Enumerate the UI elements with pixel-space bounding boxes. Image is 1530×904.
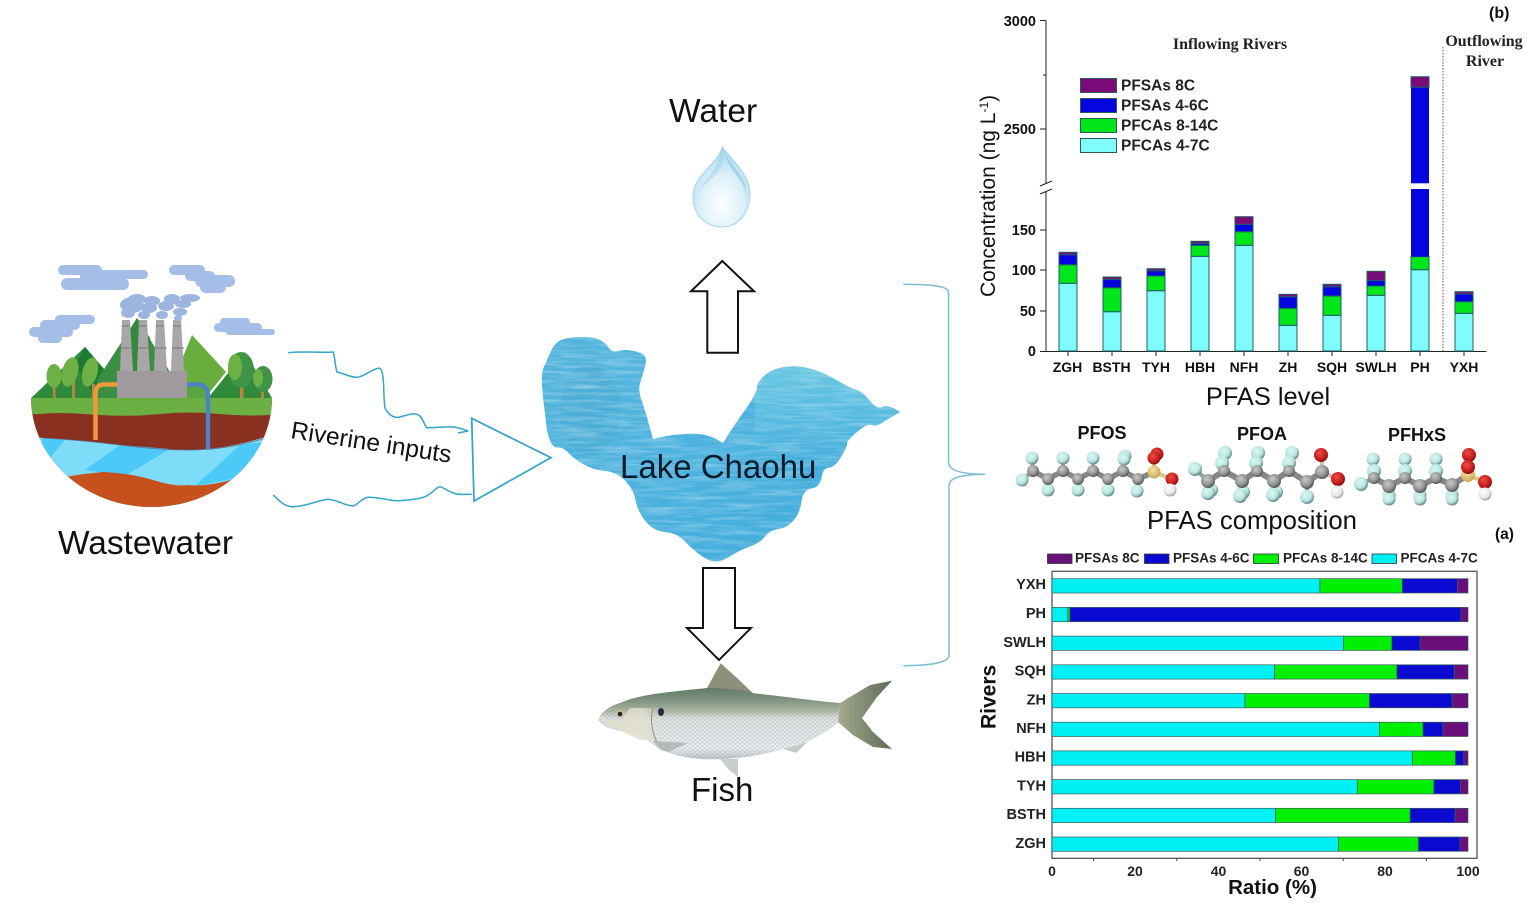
x axis: YXH	[1450, 359, 1478, 375]
bar BSTH	[1103, 277, 1121, 351]
y axis: 150	[1012, 223, 1036, 239]
y axis title: -1	[977, 102, 991, 113]
panel: lake chaohu	[535, 330, 905, 570]
group labels: Outflowing	[1445, 33, 1523, 50]
panel tag a: (a)	[1495, 526, 1514, 543]
y axis title: Rivers	[978, 665, 1000, 729]
icon: mountains and trees	[31, 318, 272, 398]
x axis: ZH	[1279, 359, 1297, 375]
PFOA name: PFOA	[1237, 424, 1287, 444]
row ZGH	[1052, 837, 1468, 851]
row labels: TYH	[1017, 778, 1046, 794]
molecule: PFOS	[1016, 448, 1178, 498]
y axis	[1004, 14, 1052, 360]
bar HBH	[1191, 241, 1209, 351]
legend	[1048, 550, 1478, 566]
panel: PFAS molecular structures	[1016, 423, 1492, 535]
row labels: PH	[1026, 606, 1046, 622]
row BSTH	[1052, 808, 1468, 823]
icon: factory chimneys	[117, 320, 187, 398]
PFOS name: PFOS	[1077, 423, 1127, 443]
stacked bars	[1059, 77, 1473, 351]
arrow: riverine inputs	[273, 352, 551, 507]
riverine inputs label: Riverine inputs	[289, 417, 453, 469]
x axis: HBH	[1185, 359, 1215, 375]
group labels	[1173, 33, 1523, 70]
legend: PFCAs 8-14C	[1121, 118, 1218, 134]
bar SWLH	[1367, 271, 1385, 351]
y axis: 50	[1020, 304, 1036, 320]
row TYH	[1052, 780, 1468, 794]
icon: polluted landscape globe	[25, 265, 280, 520]
section title: PFAS composition: PFAS composition	[1147, 507, 1357, 535]
water label: Water	[669, 93, 757, 130]
wastewater label: Wastewater	[58, 525, 233, 562]
legend: PFSAs 8C	[1075, 550, 1140, 566]
x axis tick labels: 60	[1294, 863, 1309, 879]
row YXH	[1052, 579, 1468, 593]
row labels: NFH	[1016, 721, 1046, 737]
bar PH	[1411, 77, 1429, 351]
icon: water drop	[693, 147, 750, 227]
lower river line	[273, 487, 472, 507]
panel: a composition ratio bar chart	[978, 526, 1514, 899]
legend: PFSAs 4-6C	[1173, 550, 1250, 566]
triangle arrowhead	[472, 418, 551, 501]
molecule: PFOA	[1188, 446, 1345, 504]
y axis: 100	[1012, 263, 1036, 279]
icon: soil and groundwater layers	[31, 398, 272, 507]
group labels: River	[1466, 53, 1504, 70]
brace connector	[903, 284, 985, 666]
PFHxS name: PFHxS	[1388, 425, 1446, 445]
bar ZH	[1279, 294, 1297, 351]
panel: fish output	[598, 568, 892, 808]
panel tag b: (b)	[1489, 5, 1509, 22]
row PH	[1052, 607, 1468, 622]
group labels: Inflowing Rivers	[1173, 36, 1287, 53]
x axis tick labels: 80	[1377, 863, 1393, 879]
y axis: 2500	[1004, 122, 1036, 138]
x axis: ZGH	[1053, 359, 1082, 375]
x axis: BSTH	[1092, 359, 1131, 375]
x axis: TYH	[1142, 359, 1170, 375]
legend: PFSAs 8C	[1121, 78, 1195, 94]
row labels: HBH	[1015, 750, 1046, 766]
row NFH	[1052, 722, 1468, 736]
icon: smoke plumes	[120, 294, 200, 321]
row ZH	[1052, 694, 1468, 708]
legend: PFCAs 8-14C	[1283, 550, 1368, 566]
x axis: NFH	[1230, 359, 1258, 375]
x axis tick labels: 0	[1048, 863, 1056, 879]
y axis: 3000	[1004, 14, 1036, 30]
lake label: Lake Chaohu	[620, 448, 816, 485]
row labels: ZH	[1027, 692, 1046, 708]
icon: clouds	[29, 265, 275, 343]
panel: water output	[669, 93, 757, 353]
legend	[1080, 78, 1218, 154]
y axis: 0	[1028, 344, 1036, 360]
bar SQH	[1323, 284, 1341, 351]
bar TYH	[1147, 269, 1165, 351]
y axis title: Concentration (ng L	[977, 113, 1000, 297]
molecule: PFHxS	[1354, 448, 1492, 506]
panel: b PFAS level stacked bar chart	[977, 5, 1523, 411]
x axis	[1046, 351, 1486, 375]
arrow: up to water	[691, 261, 754, 353]
row labels: BSTH	[1007, 807, 1046, 823]
panel: wastewater source	[25, 265, 280, 562]
upper river line	[288, 352, 468, 433]
legend: PFCAs 4-7C	[1400, 550, 1478, 566]
x axis tick labels: 20	[1127, 863, 1143, 879]
row SWLH	[1052, 636, 1468, 650]
chart frame	[1052, 571, 1477, 861]
icon: fish	[598, 663, 892, 777]
x axis: SWLH	[1355, 359, 1397, 375]
x axis tick labels: 100	[1456, 863, 1480, 879]
x axis tick labels: 40	[1211, 863, 1226, 879]
x axis title: PFAS level	[1206, 383, 1330, 411]
row SQH	[1052, 665, 1468, 679]
x axis: SQH	[1317, 359, 1347, 375]
row labels	[1003, 577, 1046, 852]
lake shape	[535, 330, 905, 570]
x axis tick labels	[1048, 863, 1480, 879]
y axis title: )	[977, 95, 1000, 102]
row labels: ZGH	[1015, 836, 1046, 852]
row labels: YXH	[1016, 577, 1046, 593]
x axis: PH	[1410, 359, 1430, 375]
legend: PFCAs 4-7C	[1121, 138, 1210, 154]
x axis title: Ratio (%)	[1228, 876, 1317, 899]
divider dotted line	[1442, 47, 1444, 351]
arrow: down to fish	[687, 568, 751, 660]
row labels: SQH	[1015, 664, 1046, 680]
bar ZGH	[1059, 252, 1077, 351]
bar NFH	[1235, 217, 1253, 351]
fish label: Fish	[691, 771, 753, 808]
icon: pipes	[96, 384, 208, 449]
legend: PFSAs 4-6C	[1121, 98, 1209, 114]
row HBH	[1052, 751, 1468, 765]
bar YXH	[1455, 292, 1473, 351]
stacked horizontal bars	[1052, 579, 1468, 851]
row labels: SWLH	[1003, 635, 1046, 651]
